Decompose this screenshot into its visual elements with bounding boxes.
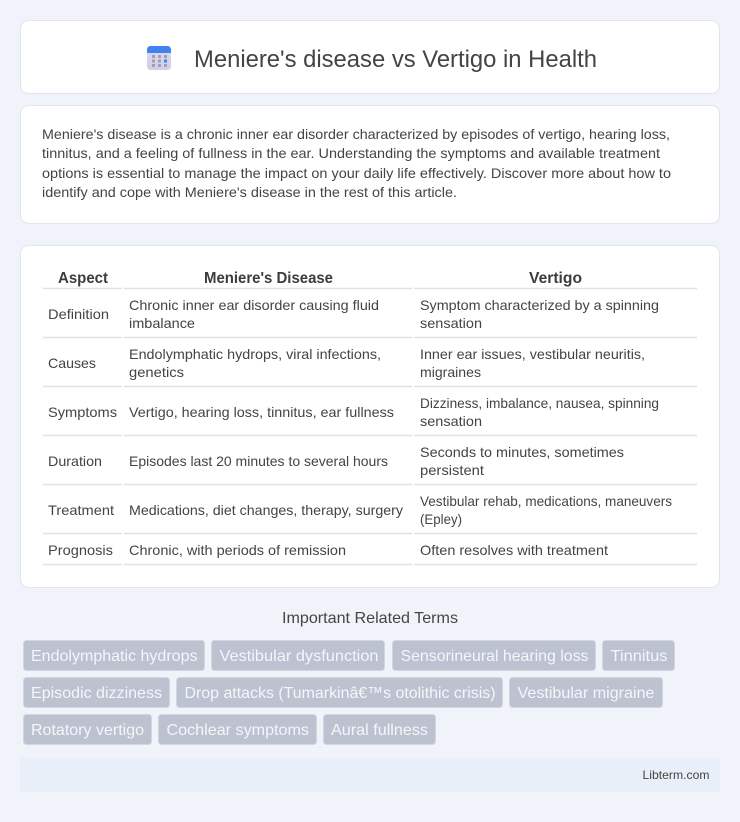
text block: introduction: tinnitus, and a feeling of fullness in the ear. Understanding the symptoms and available treatment [42,145,660,161]
row: Symptoms: Vertigo, hearing loss, tinnitus, ear fullness [129,404,394,420]
table header: Meniere's Disease [204,270,333,287]
chip: Tinnitus [610,648,668,665]
row: Duration [48,444,624,478]
row: Treatment: Treatment [48,502,114,518]
chip: Endolymphatic hydrops [31,648,198,665]
chip [212,640,384,670]
row: Causes: Causes [48,355,96,371]
chip: Vestibular dysfunction [220,648,378,665]
row: Definition: sensation [420,315,482,331]
row: Definition: imbalance [129,315,195,331]
row: Causes: Endolymphatic hydrops, viral infections, [129,346,381,362]
chip: Drop attacks (Tumarkinâ€™s otolithic crisis) [184,685,496,702]
chip [158,714,316,744]
chip: Aural fullness [331,722,428,739]
chip: Vestibular migraine [518,685,655,702]
row: Duration: persistent [420,462,484,478]
row: Treatment: Vestibular rehab, medications, maneuvers [420,493,672,509]
table header: Vertigo [529,270,582,287]
row: Prognosis: Chronic, with periods of remission [129,542,346,558]
footer [20,758,720,792]
chip [324,714,436,744]
text block: introduction: identify and cope with Meniere's disease in the rest of this article. [42,184,457,200]
panel: introduction [20,106,720,224]
chip [510,678,662,708]
row: Symptoms [48,395,659,429]
row: Symptoms: Dizziness, imbalance, nausea, spinning [420,395,659,411]
chip: Rotatory vertigo [31,722,144,739]
row: Causes [48,346,645,380]
chip: Sensorineural hearing loss [400,648,588,665]
row: Prognosis: Often resolves with treatment [420,542,608,558]
row: Definition: Chronic inner ear disorder causing fluid [129,297,379,313]
panel: header [20,20,720,94]
row: Causes: genetics [129,364,184,380]
chip: Episodic dizziness [31,685,162,702]
row: Duration: Episodes last 20 minutes to several hours [129,453,388,469]
chip [602,640,674,670]
row: Duration: Duration [48,453,102,469]
chip: Cochlear symptoms [166,722,309,739]
title: Meniere's disease vs Vertigo in Health [194,46,597,73]
table header [58,270,582,287]
icon: calendar [147,46,171,70]
text block: introduction: Meniere's disease is a chronic inner ear disorder characterized by episodes of vertigo, hearing loss, [42,126,670,142]
chip [24,678,170,708]
chip [176,678,502,708]
heading: related terms: Important Related Terms [282,610,458,627]
row: Causes: migraines [420,364,481,380]
row: Definition: Definition [48,306,109,322]
row: Duration: Seconds to minutes, sometimes [420,444,624,460]
row: Treatment: Medications, diet changes, therapy, surgery [129,502,403,518]
row: Prognosis [48,542,608,558]
panel: comparison table [20,246,720,588]
row: Causes: Inner ear issues, vestibular neuritis, [420,346,645,362]
chip [24,640,204,670]
row: Treatment [48,493,672,527]
footer credit: Libterm.com [642,768,710,782]
row: Symptoms: Symptoms [48,404,117,420]
table header: Aspect [58,270,108,287]
chip [392,640,596,670]
chip [24,714,152,744]
text block: introduction: options is essential to manage the impact on your daily life effectively. Discover more about how to [42,165,671,181]
row: Definition [48,297,659,331]
related term chips [24,640,674,744]
row: Prognosis: Prognosis [48,542,113,558]
text block: introduction [42,126,671,200]
row: Symptoms: sensation [420,413,482,429]
row: Definition: Symptom characterized by a spinning [420,297,659,313]
row: Treatment: (Epley) [420,511,462,527]
